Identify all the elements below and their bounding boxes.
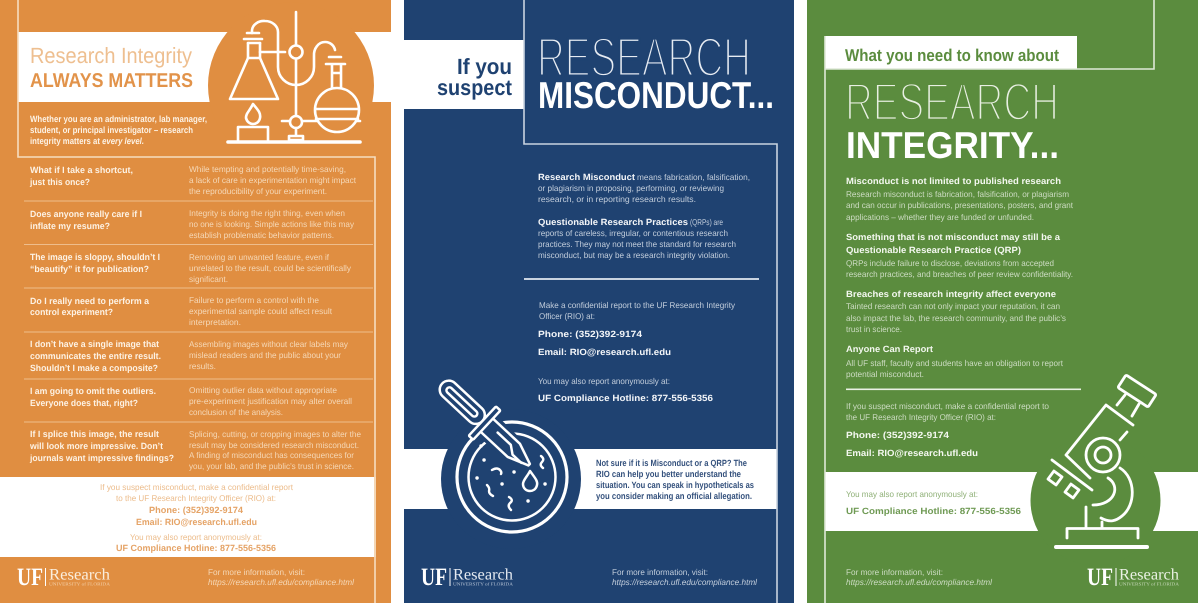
logo: UF Research: UNIVERSITY of FLORIDA (453, 582, 514, 586)
questions column: Shouldn’t I make a composite? (30, 363, 158, 373)
answers column: mislead readers and the public about your (189, 350, 341, 360)
questions column: Do I really need to perform a (30, 296, 150, 306)
section: anyone can report (846, 344, 1064, 379)
answers column: establish problematic behavior patterns. (189, 230, 334, 240)
questions column: The image is sloppy, shouldn’t I (30, 252, 160, 262)
questions column: journals want impressive findings? (29, 453, 174, 463)
section: questionable research practice (846, 232, 1073, 279)
footer link: https://research.ufl.edu/compliance.html (612, 577, 758, 587)
section: misconduct is not limited: and can occur in publications, presentations, posters, and grant (846, 200, 1074, 210)
intro text: Whether you are an administrator, lab manager, (30, 114, 207, 124)
hotline text: UF Compliance Hotline: 877-556-5356 (846, 506, 1021, 516)
icon: lab flasks and burner (228, 12, 360, 142)
logo: UF Research (1087, 564, 1180, 591)
intro text: integrity matters at every level. (30, 136, 144, 146)
section: anyone can report: Anyone Can Report (846, 344, 933, 354)
questions column: If I splice this image, the result (30, 429, 159, 439)
questions column: communicates the entire result. (30, 351, 161, 361)
report contact text: Phone: (352)392-9174 (846, 430, 949, 440)
section: breaches affect everyone (846, 289, 1066, 334)
definitions text: misconduct, but may be a research integrity violation. (538, 250, 730, 260)
answers column: While tempting and potentially time-saving, (189, 164, 346, 174)
panel: research integrity always matters (0, 0, 391, 603)
answers column: result may be considered research misconduct. (189, 440, 359, 450)
footer link: https://research.ufl.edu/compliance.html (846, 577, 993, 587)
questions column: I am going to omit the outliers. (30, 386, 156, 396)
report contact band: Email: RIO@research.ufl.edu (136, 517, 257, 527)
definitions text: Questionable Research Practices (538, 217, 688, 227)
definitions text: means fabrication, falsification, (637, 172, 750, 182)
report contact band: Phone: (352)392-9174 (149, 505, 243, 515)
answers column: interpretation. (189, 317, 241, 327)
definitions text: or plagiarism in proposing, performing, or reviewing (538, 183, 724, 193)
report contact band: If you suspect misconduct, make a confidential report (100, 482, 294, 492)
callout band (404, 409, 777, 549)
footer link: For more information, visit: (612, 567, 708, 577)
icon: petri dish and dropper (429, 369, 567, 532)
heading: research integrity: INTEGRITY... (846, 124, 1059, 166)
logo: UF Research: UNIVERSITY of FLORIDA (1119, 582, 1180, 586)
callout text: situation. You can speak in hypotheticals as (596, 480, 754, 490)
logo: UF Research: UNIVERSITY of FLORIDA (49, 582, 111, 586)
answers column: A finding of misconduct has consequences for (189, 450, 354, 460)
callout text (596, 458, 754, 501)
logo: UF Research: Research (49, 566, 110, 584)
heading: research integrity: RESEARCH (845, 73, 1059, 132)
heading: if you suspect (437, 54, 513, 100)
callout text: you consider making an official allegation. (596, 491, 752, 501)
heading: if you suspect: suspect (437, 75, 513, 100)
heading: research integrity always matters: ALWAYS MATTERS (30, 70, 193, 92)
footer link (846, 567, 993, 587)
answers column: no one is looking. Simple actions like this may (189, 219, 355, 229)
report contact text (538, 300, 736, 403)
questions column: Does anyone really care if I (30, 209, 142, 219)
logo: UF Research (17, 564, 111, 591)
answers column: Omitting outlier data without appropriate (189, 385, 337, 395)
report contact band: You may also report anonymously at: (130, 532, 262, 542)
callout text: RIO can help you better understand the (596, 469, 741, 479)
report contact band: to the UF Research Integrity Officer (RIO) at: (116, 493, 276, 503)
report contact band: UF Compliance Hotline: 877-556-5356 (116, 543, 276, 553)
section: misconduct is not limited: applications – whether they are funded or unfunded. (846, 212, 1034, 222)
section: anyone can report: potential misconduct. (846, 369, 924, 379)
questions column: will look more impressive. Don’t (29, 441, 163, 451)
questions column: “beautify” it for publication? (30, 264, 149, 274)
hotline text: You may also report anonymously at: (846, 489, 978, 499)
definitions text: practices. They may not meet the standard for research (538, 239, 736, 249)
hotline band (825, 436, 1198, 566)
questions column (29, 165, 174, 463)
logo: UF Research: UF (421, 564, 447, 591)
answers column: conclusion of the analysis. (189, 407, 283, 417)
footer link: https://research.ufl.edu/compliance.html (208, 577, 355, 587)
section: questionable research practice: research practices, and breaches of peer review confidentiality. (846, 269, 1073, 279)
header band (404, 40, 524, 109)
report contact text (846, 401, 1049, 458)
questions column: inflate my resume? (30, 221, 110, 231)
section: misconduct is not limited: Research misconduct is fabrication, falsification, or plagiarism (846, 189, 1069, 199)
logo: UF Research: Research (453, 566, 513, 584)
report contact text: the UF Research Integrity Officer (RIO) at: (846, 412, 996, 422)
intro text: student, or principal investigator – research (30, 125, 193, 135)
hotline text (846, 489, 1021, 516)
heading: research misconduct: MISCONDUCT... (538, 74, 774, 116)
answers column: experimental sample could affect result (189, 306, 333, 316)
heading: research integrity always matters (30, 43, 193, 92)
section: questionable research practice: Questionable Research Practice (QRP) (846, 245, 1021, 255)
panel: what you need to know about research integrity (807, 0, 1198, 603)
report contact text: Email: RIO@research.ufl.edu (846, 448, 978, 458)
report contact text: You may also report anonymously at: (538, 376, 670, 386)
footer link: For more information, visit: (846, 567, 943, 577)
row separators (24, 201, 373, 422)
answers column: Assembling images without clear labels may (189, 339, 349, 349)
section: misconduct is not limited: Misconduct is not limited to published research (846, 176, 1061, 186)
definitions text: Research Misconduct (538, 172, 635, 182)
answers column: a lack of care in experimentation might impact (189, 175, 357, 185)
logo: UF Research: Research (1119, 566, 1179, 584)
icon: microscope (1048, 375, 1156, 547)
report contact band (100, 482, 294, 553)
definitions text: (QRPs) are (690, 217, 723, 227)
logo: UF Research: UF (1087, 564, 1113, 591)
answers column: Integrity is doing the right thing, even when (189, 208, 345, 218)
report contact text: Officer (RIO) at: (539, 311, 595, 321)
answers column (189, 164, 361, 471)
heading: research integrity always matters: Research Integrity (30, 43, 192, 68)
logo: UF Research (421, 564, 514, 591)
heading: research misconduct: RESEARCH (537, 26, 751, 88)
heading: if you suspect: If you (457, 54, 512, 79)
answers column: significant. (189, 274, 228, 284)
report contact text: Email: RIO@research.ufl.edu (538, 347, 671, 357)
answers column: Failure to perform a control with the (189, 295, 319, 305)
callout text: Not sure if it is Misconduct or a QRP? The (596, 458, 747, 468)
section: questionable research practice: Something that is not misconduct may still be a (846, 232, 1061, 242)
definitions text: research, or in reporting research results. (538, 194, 696, 204)
report contact text: UF Compliance Hotline: 877-556-5356 (538, 393, 713, 403)
section: anyone can report: All UF staff, faculty and students have an obligation to report (846, 358, 1064, 368)
questions column: I don’t have a single image that (30, 339, 159, 349)
logo: UF Research: UF (17, 564, 43, 591)
heading: what you need to know about: What you need to know about (845, 46, 1059, 65)
footer link (612, 567, 758, 587)
questions column: control experiment? (30, 307, 113, 317)
report contact text: If you suspect misconduct, make a confidential report to (846, 401, 1049, 411)
definitions text (538, 172, 750, 260)
section: breaches affect everyone: also impact the lab, the research community, and the public’s (846, 313, 1066, 323)
footer link (208, 567, 355, 587)
definitions text: reports of careless, irregular, or contentious research (538, 228, 728, 238)
section: misconduct is not limited (846, 176, 1074, 222)
section: breaches affect everyone: Tainted research can not only impact your reputation, it can (846, 301, 1060, 311)
heading: research integrity (845, 73, 1059, 166)
answers column: you, your lab, and the public’s trust in science. (189, 461, 354, 471)
intro text (30, 114, 207, 146)
questions column: Everyone does that, right? (30, 398, 138, 408)
answers column: the reproducibility of your experiment. (189, 186, 327, 196)
report contact text: Make a confidential report to the UF Research Integrity (539, 300, 736, 310)
panel: if you suspect research misconduct (404, 0, 794, 603)
section: breaches affect everyone: trust in science. (846, 324, 902, 334)
section: questionable research practice: QRPs include failure to disclose, deviations from accepted (846, 258, 1054, 268)
answers column: unrelated to the result, could be scientifically (189, 263, 352, 273)
section: breaches affect everyone: Breaches of research integrity affect everyone (846, 289, 1056, 299)
header tab (825, 36, 1077, 69)
footer link: For more information, visit: (208, 567, 305, 577)
answers column: results. (189, 361, 216, 371)
heading: research misconduct (537, 26, 774, 116)
header band (18, 2, 391, 168)
answers column: pre-experiment justification may alter overall (189, 396, 352, 406)
questions column: just this once? (29, 177, 90, 187)
questions column: What if I take a shortcut, (30, 165, 133, 175)
answers column: Removing an unwanted feature, even if (189, 252, 330, 262)
answers column: Splicing, cutting, or cropping images to alter the (189, 429, 361, 439)
report contact text: Phone: (352)392-9174 (538, 329, 642, 339)
